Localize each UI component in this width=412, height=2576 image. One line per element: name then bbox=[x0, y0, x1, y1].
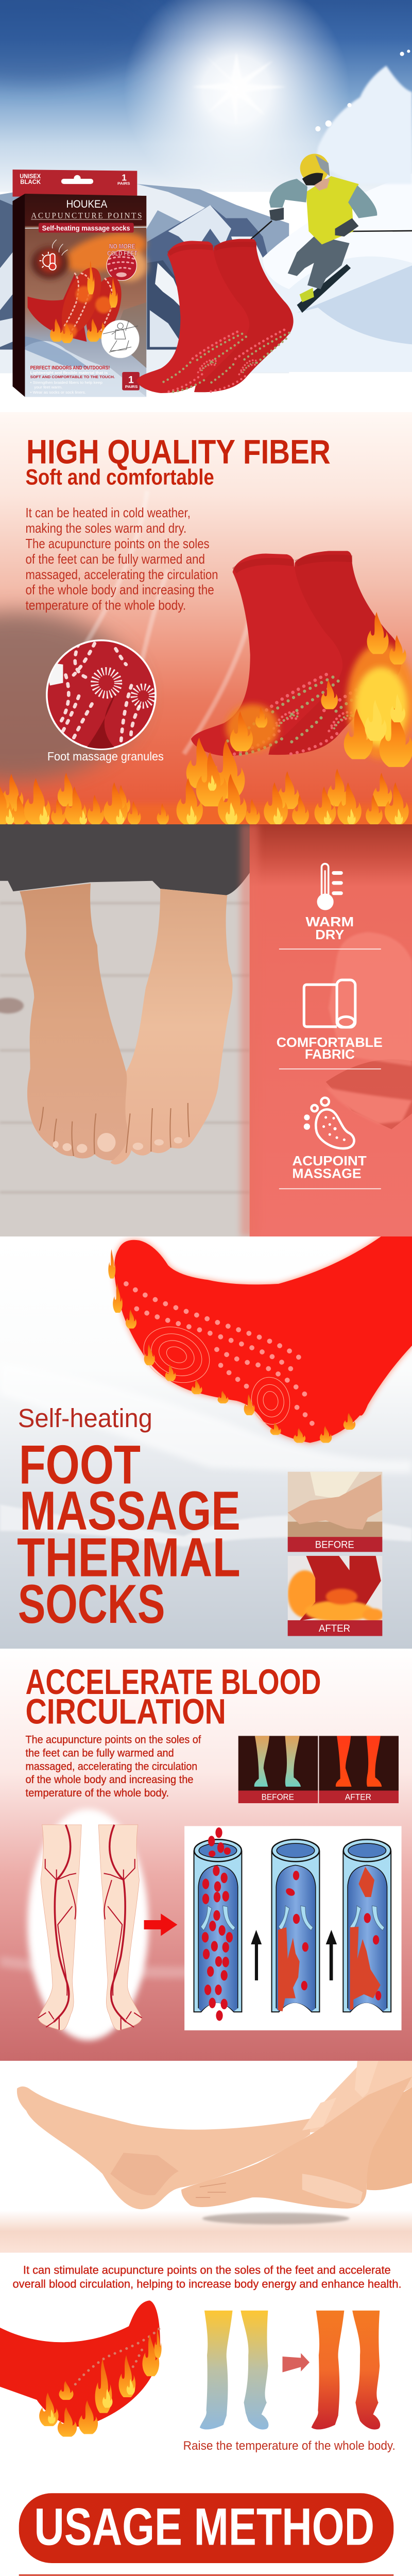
warm dry label bbox=[305, 915, 354, 942]
warm dry label: DRY bbox=[315, 928, 344, 942]
heading stack: Self-heating bbox=[18, 1403, 152, 1433]
acupoint massage label: MASSAGE bbox=[292, 1167, 362, 1181]
before photo bbox=[288, 1472, 382, 1552]
product box: Self-heating massage socks bbox=[42, 224, 130, 232]
wooden floor bbox=[0, 824, 412, 1236]
body text: temperature of the whole body. bbox=[25, 1787, 169, 1799]
temperature caption: Raise the temperature of the whole body. bbox=[183, 2439, 396, 2453]
flaming sock bbox=[0, 2300, 162, 2437]
section: accelerate blood circulation bbox=[0, 1663, 412, 2061]
comfortable fabric label: FABRIC bbox=[305, 1047, 355, 1062]
heading bbox=[25, 1663, 321, 1731]
section: bare feet with benefits panel bbox=[0, 824, 412, 1236]
snow slope and spray bbox=[147, 49, 412, 372]
stimulation caption: It can stimulate acupuncture points on the soles of the feet and accelerate bbox=[23, 2263, 391, 2276]
product box: 1 bbox=[128, 374, 134, 385]
red socks bbox=[136, 239, 294, 393]
section: hero skier scene bbox=[0, 0, 412, 397]
after thermal panel bbox=[319, 1736, 399, 1803]
body text: It can be heated in cold weather, bbox=[25, 506, 191, 520]
body text: massaged, accelerating the circulation bbox=[25, 568, 218, 582]
product box: PAIRS bbox=[117, 181, 130, 186]
heading: Soft and comfortable bbox=[25, 465, 214, 489]
product box: 1 bbox=[122, 173, 127, 183]
skier bbox=[251, 154, 412, 313]
body text: of the feet can be fully warmed and bbox=[25, 552, 205, 567]
icon: acupoint foot bbox=[304, 1098, 354, 1148]
sky with sun bbox=[0, 0, 412, 202]
body text: the feet can be fully warmed and bbox=[25, 1747, 174, 1759]
vessel diagram panel bbox=[184, 1826, 402, 2030]
product box: PAIRS bbox=[125, 384, 138, 389]
before thermal panel bbox=[238, 1736, 318, 1803]
after thermal panel: AFTER bbox=[345, 1792, 371, 1802]
body text: massaged, accelerating the circulation bbox=[25, 1760, 197, 1773]
toes and toenails bbox=[40, 1103, 189, 1156]
section: self-heating foot massage thermal socks bbox=[0, 1236, 412, 1649]
body text bbox=[25, 506, 218, 613]
body text: The acupuncture points on the soles of bbox=[25, 1734, 201, 1746]
red benefits panel bbox=[241, 824, 412, 1236]
legs with arteries bbox=[28, 1809, 148, 2040]
body text: of the whole body and increasing the bbox=[25, 1773, 194, 1786]
acupoint massage label: ACUPOINT bbox=[292, 1154, 367, 1168]
icon: fabric roll bbox=[304, 980, 355, 1027]
heading stack: SOCKS bbox=[18, 1573, 165, 1635]
warm dry label: WARM bbox=[305, 915, 354, 929]
heading stack: MASSAGE bbox=[20, 1480, 241, 1541]
hot legs silhouette bbox=[312, 2311, 380, 2430]
arrow: legs to vessels bbox=[144, 1913, 177, 1936]
body text bbox=[25, 1734, 201, 1799]
left foot bbox=[20, 884, 130, 1160]
heading stack: THERMAL bbox=[17, 1527, 241, 1588]
heading stack bbox=[17, 1403, 241, 1635]
flames along the bottom bbox=[0, 738, 412, 830]
icon: thermometer bbox=[317, 864, 341, 910]
product box: SOFT AND COMFORTABLE TO THE TOUCH. bbox=[30, 375, 115, 379]
right foot bbox=[110, 889, 233, 1164]
comfortable fabric label bbox=[277, 1036, 383, 1062]
foot massage granules circle bbox=[45, 640, 156, 751]
progression arrows bbox=[251, 1930, 337, 1980]
heading: HIGH QUALITY FIBER bbox=[26, 433, 331, 471]
product box: PERFECT INDOORS AND OUTDOORS! bbox=[30, 365, 110, 371]
product box: • Strengthen braided fibers to help keep bbox=[30, 381, 102, 385]
product box bbox=[12, 170, 150, 397]
product box: UNISEX bbox=[20, 173, 41, 180]
before thermal panel: BEFORE bbox=[262, 1792, 294, 1802]
body text: making the soles warm and dry. bbox=[25, 521, 186, 536]
body text: of the whole body and increasing the bbox=[25, 583, 214, 598]
granules caption: Foot massage granules bbox=[47, 750, 164, 763]
healthy vessel bbox=[194, 1827, 242, 2021]
section: usage method bbox=[19, 2493, 393, 2576]
snowy mountains bbox=[0, 184, 289, 373]
water reflection bbox=[0, 2211, 412, 2252]
product box: your feet warm. bbox=[34, 385, 62, 389]
heated sock sole bbox=[108, 1236, 412, 1443]
arrow: cold to hot bbox=[282, 2353, 310, 2372]
cold legs silhouette bbox=[200, 2311, 268, 2430]
stimulation caption bbox=[12, 2263, 402, 2290]
socks with flames bbox=[191, 551, 412, 767]
stimulation caption: overall blood circulation, helping to increase body energy and enhance health. bbox=[12, 2277, 402, 2290]
body text: The acupuncture points on the soles bbox=[25, 537, 210, 551]
section: feet photo and body temperature bbox=[0, 2061, 412, 2453]
product box: NO MORE bbox=[109, 243, 135, 250]
acupoint massage label bbox=[292, 1154, 367, 1181]
after photo bbox=[288, 1556, 384, 1636]
knit sweater bbox=[0, 824, 263, 895]
heading: ACCELERATE BLOOD bbox=[25, 1663, 321, 1702]
heading stack: FOOT bbox=[19, 1434, 141, 1496]
fully blocked vessel bbox=[343, 1839, 391, 2012]
feet photo bbox=[17, 2061, 412, 2209]
partly blocked vessel bbox=[272, 1839, 319, 2012]
section: high quality fiber bbox=[0, 412, 412, 824]
product box: • Wear as socks or sock liners. bbox=[30, 391, 86, 395]
product box: ACUPUNCTURE POINTS bbox=[31, 211, 142, 220]
heading bbox=[25, 433, 331, 489]
product box: BLACK bbox=[20, 178, 41, 185]
body text: temperature of the whole body. bbox=[25, 599, 186, 613]
comfortable fabric label: COMFORTABLE bbox=[277, 1036, 383, 1050]
before photo: BEFORE bbox=[315, 1539, 354, 1551]
product box: Lightweight and flexible material that is bbox=[30, 371, 108, 375]
product box: HOUKEA bbox=[66, 198, 108, 210]
after photo: AFTER bbox=[319, 1623, 350, 1634]
product box: COLD FEET bbox=[107, 249, 138, 257]
heading: CIRCULATION bbox=[25, 1692, 226, 1731]
